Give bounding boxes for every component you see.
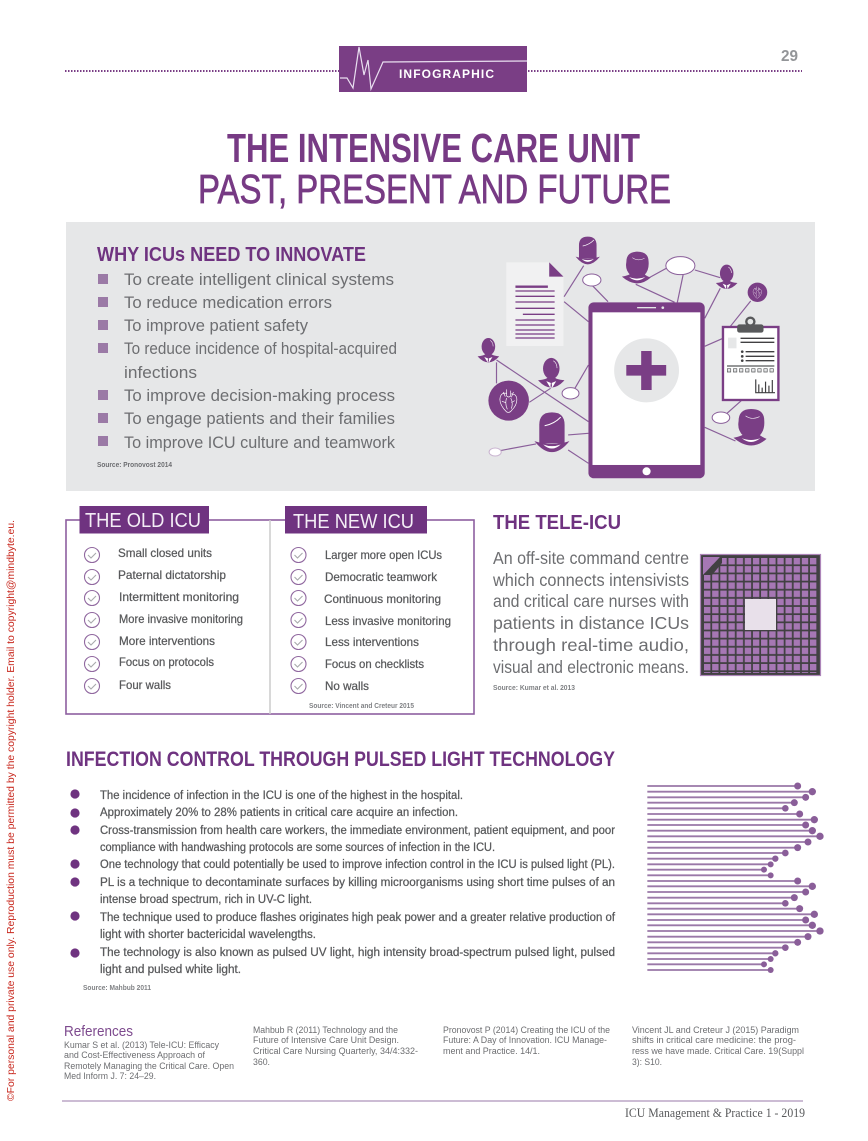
text: infection control points: One technology that could potentially be used to improve infection control in the ICU is pulsed light (PL). — [100, 859, 615, 871]
panel: the tele-ICU — [492, 512, 820, 692]
bullet list: reasons to innovate: To reduce incidence of hospital-acquired — [124, 339, 397, 358]
text: infection control points: light and pulsed white light. — [100, 964, 241, 976]
text: infection control points: The incidence of infection in the ICU is one of the highest in the hospital. — [100, 790, 463, 802]
source: Kumar: Source: Kumar et al. 2013 — [493, 685, 575, 692]
bullet list: reasons to innovate: To improve patient safety — [124, 316, 308, 335]
illustration: connected tablet network — [478, 237, 778, 478]
bullet list: reasons to innovate: To improve ICU culture and teamwork — [124, 433, 395, 452]
illustration: pulsed light lines — [647, 782, 824, 973]
text: infection control points: compliance with handwashing protocols are some sources of infection in the ICU. — [100, 842, 495, 854]
icon: small heart circle — [748, 283, 767, 302]
reference: Vincent: shifts in critical care medicine: the prog- — [632, 1035, 796, 1045]
reference: Kumar: Remotely Managing the Critical Care. Open — [64, 1061, 234, 1071]
title: PAST, PRESENT AND FUTURE — [198, 166, 671, 212]
text: tele-ICU description: through real-time audio, — [493, 635, 689, 655]
checklist icons: old ICU — [84, 548, 100, 694]
list: old ICU: More interventions — [119, 634, 215, 648]
list: old ICU: More invasive monitoring — [119, 612, 243, 626]
panel: infection control — [66, 748, 824, 992]
references heading: References — [64, 1023, 133, 1040]
panel: old ICU vs new ICU — [66, 506, 474, 714]
icon: large heart circle — [488, 381, 529, 421]
footer: publication: ICU Management & Practice 1 - 2019 — [625, 1106, 805, 1120]
reference: Mahbub: Mahbub R (2011) Technology and the — [253, 1025, 398, 1035]
reference: Kumar: Kumar S et al. (2013) Tele-ICU: Efficacy — [64, 1040, 219, 1050]
reference: Vincent: ress we have made. Critical Care. 19(Suppl — [632, 1046, 804, 1056]
list: new ICU — [324, 548, 451, 693]
title — [198, 125, 671, 212]
text: infection control points: intense broad spectrum, rich in UV-C light. — [100, 894, 312, 906]
reference: Pronovost: ment and Practice. 14/1. — [443, 1046, 540, 1056]
source: Vincent and Creteur: Source: Vincent and Creteur 2015 — [309, 703, 414, 710]
list: new ICU: Democratic teamwork — [325, 570, 438, 584]
reference: Vincent — [632, 1025, 804, 1067]
text: infection control points — [100, 790, 616, 976]
text: tele-ICU description — [492, 548, 689, 677]
text: infection control points: light with shorter bactericidal wavelengths. — [100, 929, 316, 941]
bullet list: reasons to innovate: infections — [124, 363, 197, 382]
list: old ICU: Four walls — [119, 678, 171, 692]
reference: Mahbub — [253, 1025, 418, 1067]
tab: the new ICU: THE NEW ICU — [293, 511, 414, 533]
bullet markers — [70, 789, 80, 958]
tab: the old ICU: THE OLD ICU — [85, 510, 201, 532]
list: new ICU: Larger more open ICUs — [325, 548, 442, 562]
text: infection control points: The technique used to produce flashes originates high peak power and a greater relative production of — [100, 912, 616, 924]
checklist icons: new ICU — [291, 548, 306, 694]
source: Mahbub: Source: Mahbub 2011 — [83, 985, 151, 992]
reference: Pronovost: Future: A Day of Innovation. ICU Manage- — [443, 1035, 607, 1045]
icon: tablet with medical cross — [588, 302, 705, 478]
reference: Pronovost: Pronovost P (2014) Creating the ICU of the — [443, 1025, 610, 1035]
reference: Mahbub: 360. — [253, 1057, 270, 1067]
icon: document — [506, 262, 563, 346]
list: old ICU: Small closed units — [118, 546, 212, 560]
title: THE INTENSIVE CARE UNIT — [227, 125, 640, 171]
icon: clipboard — [723, 318, 778, 400]
text: infection control points: The technology is also known as pulsed UV light, high intensity broad-spectrum pulsed light, pulsed — [100, 947, 615, 959]
text: tele-ICU description: which connects intensivists — [492, 570, 689, 590]
speech bubbles — [489, 257, 730, 456]
list: new ICU: Continuous monitoring — [324, 592, 441, 606]
text: infection control points: Approximately 20% to 28% patients in critical care acquire an infection. — [100, 807, 458, 819]
text: tele-ICU description: patients in distance ICUs — [493, 613, 689, 633]
reference: Mahbub: Critical Care Nursing Quarterly, 34/4:332- — [253, 1046, 418, 1056]
copyright notice: ©For personal and private use only. Reproduction must be permitted by the copyright holder. Email to copyright@mindbyte.eu. — [5, 520, 17, 1101]
bullet list: reasons to innovate: To reduce medication errors — [124, 293, 332, 312]
bullet list: reasons to innovate: To create intelligent clinical systems — [124, 270, 394, 289]
panel: why ICUs need to innovate — [66, 222, 815, 491]
list: old ICU: Focus on protocols — [119, 655, 214, 669]
bullet list: reasons to innovate: To engage patients and their families — [124, 409, 395, 428]
text: tele-ICU description: and critical care nurses with — [493, 591, 689, 611]
reference: Kumar — [64, 1040, 234, 1081]
reference: Vincent: Vincent JL and Creteur J (2015) Paradigm — [632, 1025, 799, 1035]
text: infection control points: PL is a technique to decontaminate surfaces by killing microorganisms using short time pulses of an — [100, 877, 615, 889]
bullet list: reasons to innovate: To improve decision-making process — [124, 386, 395, 405]
list: new ICU: No walls — [325, 679, 369, 693]
page number: 29 — [781, 48, 798, 65]
list: old ICU: Paternal dictatorship — [118, 568, 226, 582]
reference: Pronovost — [443, 1025, 610, 1056]
reference: Kumar: Med Inform J. 7: 24–29. — [64, 1071, 156, 1081]
reference: Kumar: and Cost-Effectiveness Approach of — [64, 1050, 205, 1060]
bullet list: reasons to innovate — [98, 270, 397, 452]
text: tele-ICU description: An off-site command centre — [493, 548, 689, 568]
list: new ICU: Less invasive monitoring — [325, 614, 451, 628]
source: Pronovost: Source: Pronovost 2014 — [97, 462, 172, 469]
list: old ICU — [118, 546, 243, 692]
section banner: infographic: INFOGRAPHIC — [399, 67, 494, 81]
reference: Mahbub: Future of Intensive Care Unit Design. — [253, 1035, 399, 1045]
heading: infection control: INFECTION CONTROL THROUGH PULSED LIGHT TECHNOLOGY — [66, 748, 615, 771]
reference: Vincent: 3): S10. — [632, 1057, 662, 1067]
section banner: infographic — [65, 46, 802, 92]
text: tele-ICU description: visual and electronic means. — [493, 657, 689, 677]
references — [64, 1023, 804, 1081]
heading: why ICUs need to innovate: WHY ICUs NEED TO INNOVATE — [97, 244, 366, 266]
list: new ICU: Less interventions — [325, 635, 419, 649]
list: new ICU: Focus on checklists — [325, 657, 424, 671]
heading: the tele-ICU: THE TELE-ICU — [493, 512, 621, 534]
list: old ICU: Intermittent monitoring — [119, 590, 239, 604]
text: infection control points: Cross-transmission from health care workers, the immediate environment, patient equipment, and poor — [100, 825, 615, 837]
icon: command centre screen grid — [700, 554, 820, 676]
people avatars — [478, 237, 767, 452]
